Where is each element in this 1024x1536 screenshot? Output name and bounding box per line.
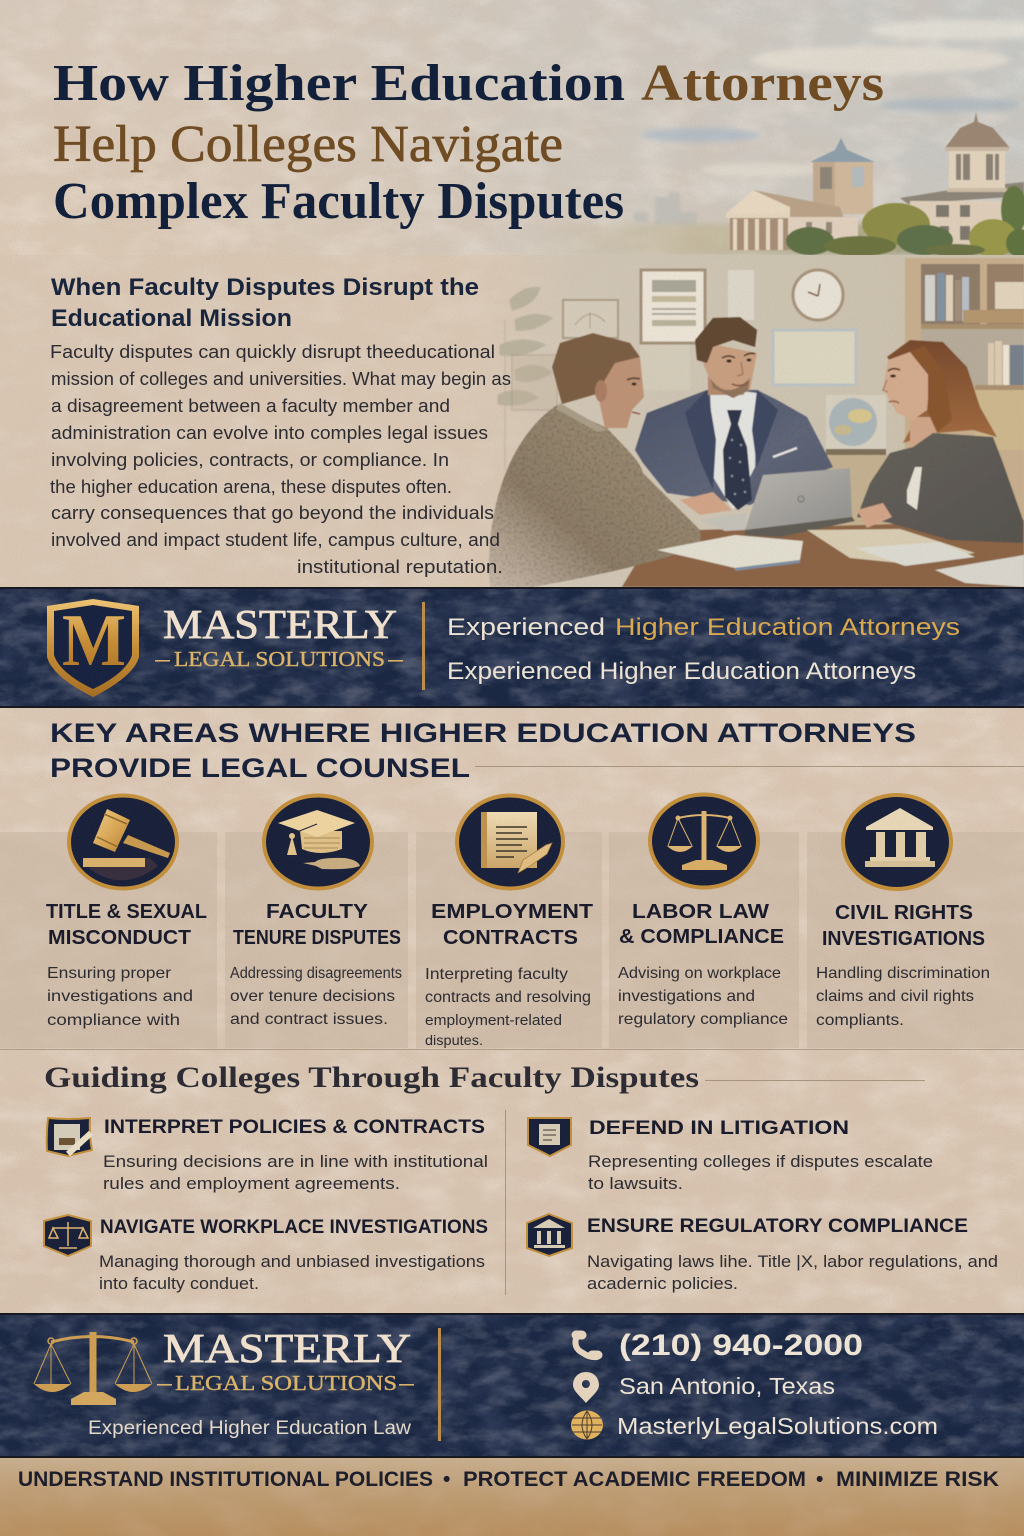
intro text: mission of colleges and universities. What may begin as: [51, 369, 511, 389]
footer strip: UNDERSTAND INSTITUTIONAL POLICIES: [18, 1468, 433, 1491]
tagline: [447, 614, 960, 685]
man left: [489, 333, 701, 587]
card text: employment-related: [425, 1012, 562, 1029]
item: interpret policies: [47, 1117, 488, 1193]
plant: [498, 288, 552, 470]
intro text: institutional reputation.: [297, 557, 503, 577]
globe: [826, 395, 886, 451]
item: ensure compliance: [527, 1214, 998, 1293]
card text: disputes.: [425, 1032, 483, 1048]
desk: [622, 520, 1024, 587]
intro heading: When Faculty Disputes Disrupt the: [51, 274, 479, 301]
wall clock: [793, 270, 843, 320]
tagline: Higher Education Attorneys: [615, 614, 960, 641]
intro text: involving policies, contracts, or compliance. In: [51, 450, 449, 470]
card text: EMPLOYMENT: [431, 901, 593, 923]
intro text: [50, 342, 511, 577]
tagline: Experienced Higher Education Law: [88, 1418, 411, 1439]
item: ensure compliance: ENSURE REGULATORY COMPLIANCE: [587, 1216, 968, 1237]
item: navigate investigations: into faculty conduet.: [99, 1274, 259, 1293]
card text: [816, 902, 990, 1029]
papers: [657, 535, 803, 568]
icon: document and quill: [47, 1118, 92, 1156]
intro text: the higher education arena, these disputes often.: [50, 477, 452, 497]
title: Complex Faculty Disputes: [53, 173, 624, 230]
panel: contact banner: [0, 1313, 1024, 1458]
intro text: a disagreement between a faculty member and: [51, 396, 450, 416]
card text: regulatory compliance: [618, 1011, 788, 1028]
phone number: (210) 940-2000: [619, 1329, 863, 1362]
laptop: [745, 468, 852, 530]
trees: [786, 186, 1024, 257]
icon: globe: [571, 1410, 603, 1440]
icon: gold scales: [34, 1332, 152, 1405]
card text: over tenure decisions: [230, 988, 395, 1005]
heading: key areas: PROVIDE LEGAL COUNSEL: [50, 753, 470, 783]
logo wordmark: MASTERLY: [163, 1325, 411, 1371]
card text: Interpreting faculty: [425, 966, 568, 983]
card text: investigations and: [618, 988, 755, 1005]
title: Attorneys: [641, 55, 884, 112]
woman: [857, 340, 1023, 543]
icon: scale badge: [44, 1215, 91, 1256]
card text: compliance with: [47, 1012, 180, 1029]
card text: [618, 901, 788, 1028]
website: MasterlyLegalSolutions.com: [617, 1413, 938, 1439]
item: navigate investigations: Managing thorough and unbiased investigations: [99, 1252, 485, 1271]
card text: CIVIL RIGHTS: [835, 902, 973, 924]
card text: [425, 901, 593, 1048]
card text: TITLE & SEXUAL: [46, 901, 207, 923]
icon: contract and pen: [457, 796, 563, 888]
footer strip: PROTECT ACADEMIC FREEDOM: [463, 1468, 806, 1491]
intro heading: [51, 274, 479, 332]
card text: Ensuring proper: [47, 965, 172, 982]
man centre: [635, 317, 833, 515]
footer strip: [0, 1458, 1024, 1536]
footer strip: •: [443, 1468, 450, 1491]
card text: & COMPLIANCE: [619, 926, 784, 948]
title: Help Colleges Navigate: [53, 116, 563, 173]
icon: courthouse: [843, 795, 951, 889]
intro text: Faculty disputes can quickly disrupt theeducational: [50, 342, 495, 362]
card text: Handling discrimination: [816, 965, 990, 982]
heading: key areas: [50, 718, 916, 783]
card text: claims and civil rights: [816, 988, 974, 1005]
title: How Higher Education: [53, 55, 625, 112]
item: interpret policies: INTERPRET POLICIES & CONTRACTS: [104, 1117, 485, 1138]
tagline: Experienced Higher Education Attorneys: [447, 658, 916, 685]
tower one: [810, 138, 875, 162]
main hall: [750, 190, 845, 222]
panel: employment contracts: [416, 796, 602, 1048]
intro text: administration can evolve into comples legal issues: [51, 423, 488, 443]
logo wordmark: [157, 1325, 414, 1395]
icon: location pin: [573, 1372, 599, 1403]
framed certificates: [563, 300, 618, 338]
bookshelf: [905, 258, 1024, 530]
title: [53, 55, 884, 230]
icon: legal brief: [528, 1118, 571, 1156]
panel: title and sexual misconduct: [0, 796, 217, 1048]
item: ensure compliance: Navigating laws lihe. Title |X, labor regulations, and: [587, 1252, 998, 1271]
logo wordmark: [155, 601, 403, 671]
icon: M shield: [47, 599, 139, 697]
campus illustration: [520, 20, 1024, 257]
icon: M shield: M: [62, 600, 126, 682]
panel: intro with office scene: [0, 255, 1024, 587]
panel: labor law and compliance: [609, 794, 799, 1048]
panel: civil rights investigations: [807, 795, 1024, 1048]
item: interpret policies: rules and employment agreements.: [103, 1174, 400, 1193]
icon: balance scale: [650, 794, 758, 888]
icon: phone: [575, 1335, 598, 1357]
intro heading: Educational Mission: [51, 305, 292, 332]
card text: investigations and: [47, 988, 193, 1005]
card text: MISCONDUCT: [48, 927, 191, 949]
item: defend in litigation: [528, 1118, 933, 1193]
logo wordmark: MASTERLY: [163, 601, 397, 647]
tower two: [945, 112, 1010, 148]
card text: [46, 901, 207, 1029]
location: San Antonio, Texas: [619, 1373, 835, 1399]
intro text: involved and impact student life, campus culture, and: [51, 530, 500, 550]
office illustration: [489, 258, 1024, 587]
logo wordmark: LEGAL SOLUTIONS: [175, 1371, 397, 1395]
heading: guiding colleges: Guiding Colleges Through Faculty Disputes: [44, 1061, 699, 1094]
panel: brand banner: [0, 587, 1024, 708]
card text: FACULTY: [266, 901, 369, 923]
item: interpret policies: Ensuring decisions are in line with institutional: [103, 1152, 488, 1171]
icon: courthouse badge: [527, 1214, 572, 1256]
card text: [230, 901, 402, 1028]
heading: key areas: KEY AREAS WHERE HIGHER EDUCATION ATTORNEYS: [50, 718, 916, 748]
card text: TENURE DISPUTES: [233, 927, 401, 949]
item: defend in litigation: Representing colleges if disputes escalate: [588, 1152, 933, 1171]
card text: Advising on workplace: [618, 965, 781, 982]
item: defend in litigation: DEFEND IN LITIGATION: [589, 1118, 849, 1139]
logo wordmark: LEGAL SOLUTIONS: [174, 647, 385, 671]
card text: Addressing disagreements: [230, 965, 402, 982]
east wing: [900, 182, 1024, 204]
item: navigate investigations: [44, 1215, 488, 1293]
icon: gavel: [69, 796, 177, 888]
item: ensure compliance: acadernic policies.: [587, 1274, 738, 1293]
footer strip: •: [816, 1468, 823, 1491]
item: defend in litigation: to lawsuits.: [588, 1174, 683, 1193]
card text: LABOR LAW: [632, 901, 769, 923]
panel: faculty tenure disputes: [225, 796, 408, 1048]
card text: contracts and resolving: [425, 989, 591, 1006]
card text: compliants.: [816, 1012, 904, 1029]
card text: INVESTIGATIONS: [822, 928, 985, 950]
intro text: carry consequences that go beyond the individuals: [51, 503, 494, 523]
card text: and contract issues.: [230, 1011, 388, 1028]
tagline: Experienced: [447, 614, 605, 641]
icon: graduation cap: [264, 796, 372, 888]
card text: CONTRACTS: [443, 927, 578, 949]
footer strip: MINIMIZE RISK: [836, 1468, 999, 1491]
item: navigate investigations: NAVIGATE WORKPLACE INVESTIGATIONS: [100, 1217, 488, 1238]
